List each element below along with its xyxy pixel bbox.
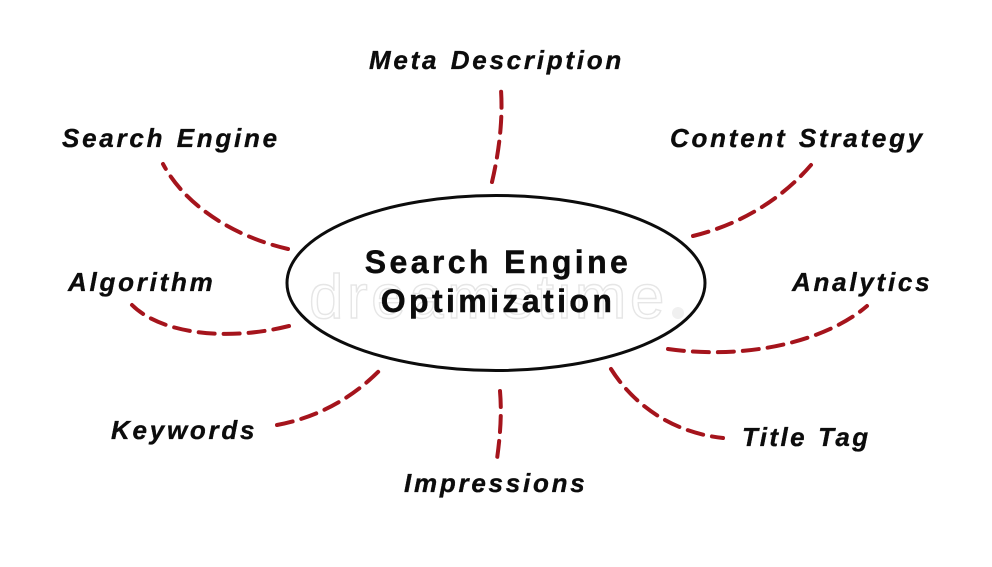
central ellipse: Search Engine Optimization: Search Engine [365,244,631,280]
connector: Impressions [497,391,501,459]
connector: Title Tag [611,369,723,438]
connector: Search Engine [163,164,288,249]
central ellipse: Search Engine Optimization [287,196,705,370]
label: Algorithm: Algorithm [67,267,216,297]
connector: Analytics [668,306,867,352]
connector: Keywords [277,371,379,425]
connector: Content Strategy [693,165,811,236]
label: Title Tag: Title Tag [742,422,871,452]
label: Keywords: Keywords [111,415,257,445]
label: Impressions: Impressions [404,468,587,498]
connector: Algorithm [132,305,289,334]
label: Analytics: Analytics [791,267,932,297]
label: Meta Description: Meta Description [369,45,624,75]
central ellipse: Search Engine Optimization: Optimization [381,283,615,319]
label: Content Strategy: Content Strategy [670,123,925,153]
central ellipse: Search Engine Optimization: dreamstime [309,263,668,332]
label: Search Engine: Search Engine [62,123,280,153]
connector: Meta Description [492,90,502,182]
